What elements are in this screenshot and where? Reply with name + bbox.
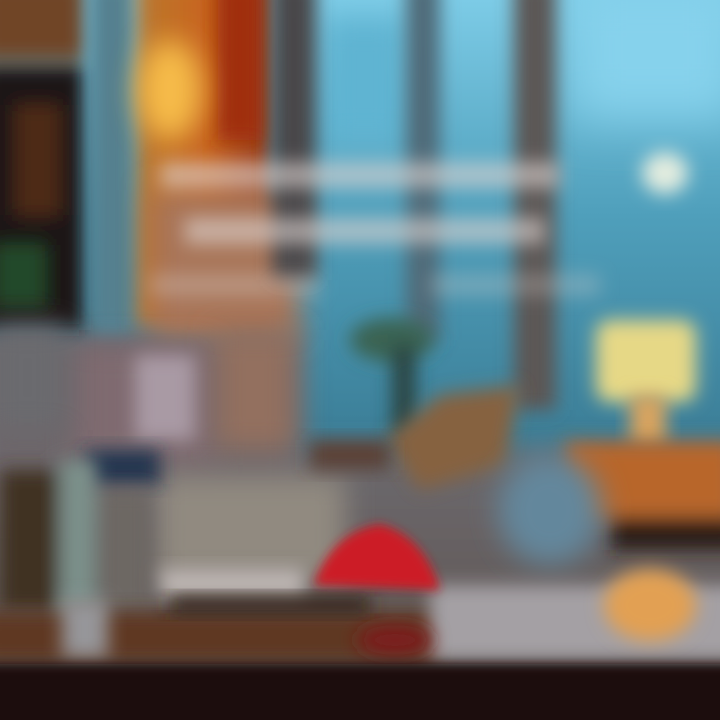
window frames (272, 0, 556, 410)
red object (314, 524, 440, 655)
left wall and bookshelf (0, 0, 85, 330)
blue grey column (90, 0, 134, 330)
person (0, 325, 345, 580)
dark floor strip (0, 664, 720, 720)
side table (565, 442, 720, 550)
laptop and chair (310, 385, 602, 565)
foreground bottles left (0, 460, 150, 630)
table lamp (596, 320, 696, 445)
table surface (0, 568, 720, 662)
plant (350, 318, 434, 435)
blurred headline text bands (150, 162, 600, 296)
lower room backdrop (0, 330, 720, 690)
moon (642, 152, 688, 194)
warm curtain and lamp glow (137, 0, 300, 340)
